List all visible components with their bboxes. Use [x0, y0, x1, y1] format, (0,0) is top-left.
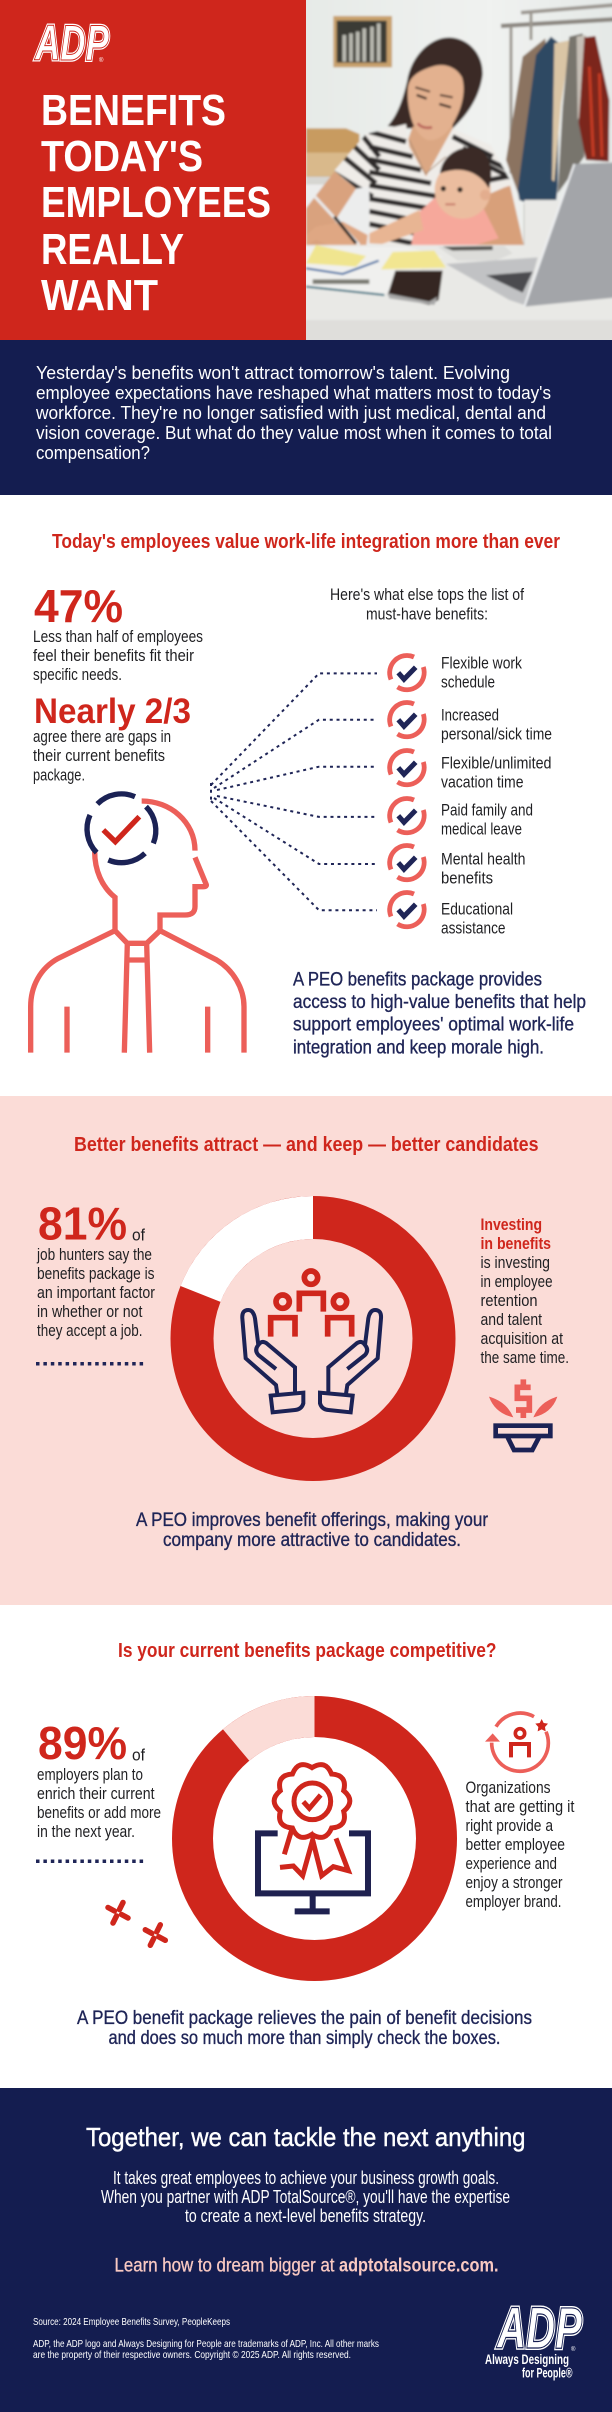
stat: 89%: in the next year.: [37, 1822, 135, 1841]
benefit 3: flexible/unlimited vacation time: vacation time: [441, 772, 524, 792]
stat: 81%: they accept a job.: [37, 1321, 142, 1340]
stat: 47%: 47%: [34, 580, 123, 632]
benefit 6: educational assistance: assistance: [441, 918, 506, 938]
title: TODAY'S: [41, 132, 203, 181]
side note: investing in benefits: acquisition at: [480, 1329, 563, 1348]
icon: hands holding people: [242, 1271, 381, 1412]
ADP logo: ADP: [34, 15, 109, 71]
list intro: [330, 585, 524, 624]
benefit 4: paid family and medical leave: Paid family and: [441, 800, 533, 820]
header panel: red title block: [0, 0, 306, 340]
intro text: vision coverage. But what do they value most when it comes to total: [36, 423, 552, 443]
panel: better candidates: [0, 1096, 612, 1605]
source and legal text: are the property of their respective owners. Copyright © 2025 ADP. All rights reserved.: [33, 2349, 351, 2361]
source and legal text: Source: 2024 Employee Benefits Survey, PeopleKeeps: [33, 2316, 230, 2328]
intro text: Yesterday's benefits won't attract tomorrow's talent. Evolving: [36, 363, 510, 383]
benefit 2: increased personal/sick time: [390, 702, 552, 744]
call to action: adptotalsource.com.: [339, 2254, 498, 2276]
section: work-life integration: [31, 530, 586, 1058]
icon: award ribbon on monitor: [258, 1765, 368, 1912]
benefit 1: flexible work schedule: schedule: [441, 672, 495, 692]
PEO callout: support employees' optimal work-life: [293, 1014, 574, 1036]
side note: investing in benefits: in employee: [480, 1272, 552, 1291]
stat: 81%: in whether or not: [37, 1302, 143, 1321]
stat: 89%: [37, 1717, 161, 1841]
heading: Better benefits attract — and keep — better candidates: [74, 1133, 538, 1156]
PEO callout: A PEO improves benefit offerings, making your: [136, 1510, 489, 1531]
icon: person with check in head: [31, 794, 244, 1053]
side note: organizations: right provide a: [466, 1816, 553, 1835]
icon: employee with star and cycle arrow: [485, 1713, 548, 1771]
stat: 47%: specific needs.: [33, 665, 122, 684]
call to action: [114, 2254, 498, 2276]
benefit 2: increased personal/sick time: personal/sick time: [441, 724, 552, 744]
stat: 81%: job hunters say the: [36, 1245, 152, 1264]
intro text: workforce. They're no longer satisfied with just medical, dental and: [35, 403, 546, 423]
stat: 89%: benefits or add more: [37, 1803, 161, 1822]
call to action: Learn how to dream bigger at: [114, 2254, 335, 2276]
stat: nearly 2/3: package.: [33, 766, 85, 784]
footer text: [101, 2168, 510, 2226]
benefit 1: flexible work schedule: [390, 654, 522, 692]
stat: nearly 2/3: [33, 691, 191, 784]
stat: 81%: an important factor: [37, 1283, 155, 1302]
stat: 47%: Less than half of employees: [33, 627, 203, 646]
PEO callout: company more attractive to candidates.: [163, 1530, 461, 1551]
ADP logo and tagline: ®: [571, 2346, 576, 2353]
dotted connector lines: [211, 673, 377, 910]
benefit 6: educational assistance: Educational: [441, 900, 513, 918]
benefit 5: mental health benefits: benefits: [441, 868, 493, 888]
PEO callout: [77, 2008, 532, 2049]
ADP logo and tagline: for People®: [522, 2366, 573, 2380]
benefit 4: paid family and medical leave: [390, 798, 533, 838]
footer text: It takes great employees to achieve your business growth goals.: [113, 2168, 499, 2188]
benefit 4: paid family and medical leave: medical leave: [441, 820, 522, 838]
stat: nearly 2/3: agree there are gaps in: [33, 727, 171, 746]
heading: Is your current benefits package competitive?: [118, 1639, 496, 1662]
side note: investing in benefits: Investing: [480, 1215, 542, 1234]
photo: mother with baby working at a desk: [303, 0, 612, 343]
benefit 6: educational assistance: [390, 892, 513, 938]
list intro: must-have benefits:: [366, 604, 488, 624]
side note: investing in benefits: the same time.: [480, 1348, 569, 1367]
side note: organizations: better employee: [466, 1835, 565, 1854]
ADP logo and tagline: [485, 2296, 582, 2380]
side note: investing in benefits: and talent: [480, 1310, 542, 1329]
stat: 89%: 89%: [38, 1717, 127, 1769]
side note: organizations: enjoy a stronger: [466, 1873, 563, 1892]
stat: nearly 2/3: their current benefits: [33, 746, 165, 765]
stat: 89%: employers plan to: [37, 1765, 143, 1784]
benefit 3: flexible/unlimited vacation time: [390, 750, 552, 792]
stat: 81%: 81%: [38, 1198, 127, 1250]
intro text: compensation?: [36, 443, 150, 463]
footer panel: [0, 2088, 612, 2412]
list intro: Here's what else tops the list of: [330, 585, 524, 604]
benefit 1: flexible work schedule: Flexible work: [441, 654, 522, 672]
stat: 81%: [36, 1198, 155, 1340]
stat: nearly 2/3: Nearly 2/3: [34, 691, 191, 731]
section: competitive package: [36, 1639, 575, 2049]
PEO callout: integration and keep morale high.: [293, 1038, 544, 1058]
icon: sparkles: [108, 1902, 165, 1945]
title: WANT: [41, 271, 158, 320]
source and legal text: [33, 2316, 379, 2361]
benefit 2: increased personal/sick time: Increased: [441, 706, 499, 724]
source and legal text: ADP, the ADP logo and Always Designing for People are trademarks of ADP, Inc. All other marks: [33, 2338, 379, 2350]
intro panel: [0, 340, 612, 495]
stat: 81%: of: [132, 1226, 145, 1244]
donut chart: 81%: [180, 1196, 434, 1460]
side note: organizations: experience and: [466, 1854, 557, 1873]
side note: investing in benefits: [480, 1215, 569, 1367]
ADP logo: ADP: [34, 15, 109, 71]
PEO callout: A PEO benefit package relieves the pain of benefit decisions: [77, 2008, 532, 2029]
stat: 89%: of: [132, 1746, 145, 1764]
side note: organizations: [466, 1778, 575, 1911]
footer text: to create a next-level benefits strategy.: [185, 2206, 426, 2226]
side note: investing in benefits: is investing: [480, 1253, 550, 1272]
title: BENEFITS: [41, 86, 226, 135]
PEO callout: access to high-value benefits that help: [293, 992, 586, 1013]
intro text: [35, 363, 552, 463]
footer heading: Together, we can tackle the next anything: [86, 2122, 526, 2152]
benefit 5: mental health benefits: Mental health: [441, 850, 526, 868]
side note: organizations: Organizations: [466, 1778, 550, 1797]
PEO callout: A PEO benefits package provides: [293, 970, 542, 990]
side note: organizations: employer brand.: [466, 1892, 562, 1911]
title: REALLY: [41, 225, 184, 274]
benefit 5: mental health benefits: [390, 845, 526, 888]
ADP logo: [34, 15, 109, 71]
PEO callout: [136, 1510, 489, 1551]
intro text: employee expectations have reshaped what matters most to today's: [36, 383, 551, 403]
icon: money plant: [489, 1379, 557, 1450]
ADP logo: ®: [99, 57, 104, 64]
title: [41, 86, 271, 320]
donut chart: 89%: [192, 1696, 436, 1960]
side note: organizations: that are getting it: [466, 1797, 575, 1816]
stat: 47%: [33, 580, 203, 684]
PEO callout: and does so much more than simply check the boxes.: [108, 2028, 500, 2049]
stat: 89%: enrich their current: [37, 1784, 155, 1803]
side note: investing in benefits: retention: [480, 1291, 538, 1310]
title: EMPLOYEES: [41, 178, 271, 227]
ADP logo and tagline: Always Designing: [485, 2352, 569, 2367]
PEO callout: [293, 970, 586, 1058]
benefit 3: flexible/unlimited vacation time: Flexible/unlimited: [441, 754, 552, 772]
side note: investing in benefits: in benefits: [480, 1234, 551, 1253]
stat: 81%: benefits package is: [37, 1264, 154, 1283]
stat: 47%: feel their benefits fit their: [33, 646, 194, 665]
